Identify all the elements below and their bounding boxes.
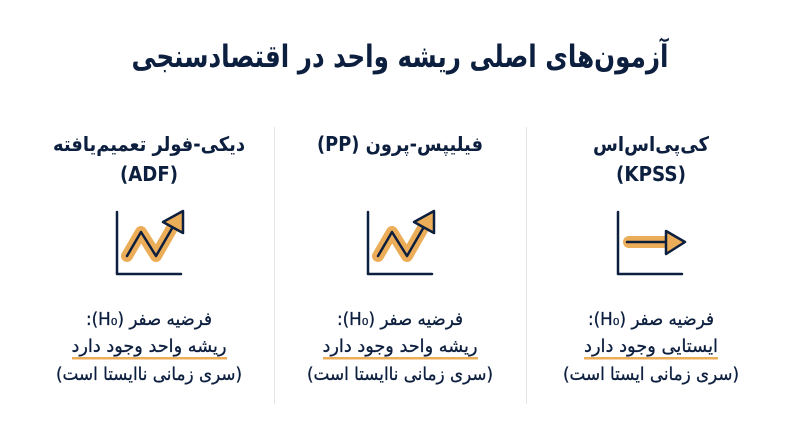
- panel: PP: [307, 132, 493, 385]
- icon: rising trend chart: [117, 211, 183, 274]
- icon: rising trend chart: [368, 211, 434, 274]
- text: null hypothesis PP: (سری زمانی ناایستا است): [307, 364, 493, 385]
- text: null hypothesis KPSS: [563, 309, 739, 385]
- panel: KPSS: [563, 132, 739, 385]
- text: null hypothesis KPSS: فرضیه صفر (H₀):: [588, 309, 714, 330]
- heading: ADF: (ADF): [120, 162, 178, 186]
- heading: PP: فیلیپس-پرون (PP): [317, 132, 483, 157]
- text: null hypothesis PP: [307, 309, 493, 385]
- heading: KPSS: [593, 132, 709, 186]
- text: null hypothesis KPSS: (سری زمانی ایستا است): [563, 364, 739, 385]
- heading: KPSS: کی‌پی‌اس‌اس: [593, 132, 709, 157]
- text: null hypothesis PP: ریشه واحد وجود دارد: [322, 336, 478, 357]
- icon: flat trend arrow chart: [618, 212, 685, 274]
- title: آزمون‌های اصلی ریشه واحد در اقتصادسنجی: [132, 37, 670, 75]
- text: null hypothesis KPSS: ایستایی وجود دارد: [584, 336, 718, 357]
- heading: ADF: [53, 132, 245, 186]
- panel: ADF: [53, 132, 245, 385]
- heading: KPSS: (KPSS): [616, 162, 686, 186]
- text: null hypothesis ADF: فرضیه صفر (H₀):: [86, 309, 212, 330]
- text: null hypothesis ADF: [56, 309, 242, 385]
- text: null hypothesis PP: فرضیه صفر (H₀):: [337, 309, 463, 330]
- text: null hypothesis ADF: ریشه واحد وجود دارد: [72, 336, 226, 357]
- text: null hypothesis ADF: (سری زمانی ناایستا است): [56, 364, 242, 385]
- heading: ADF: دیکی-فولر تعمیم‌یافته: [53, 132, 245, 156]
